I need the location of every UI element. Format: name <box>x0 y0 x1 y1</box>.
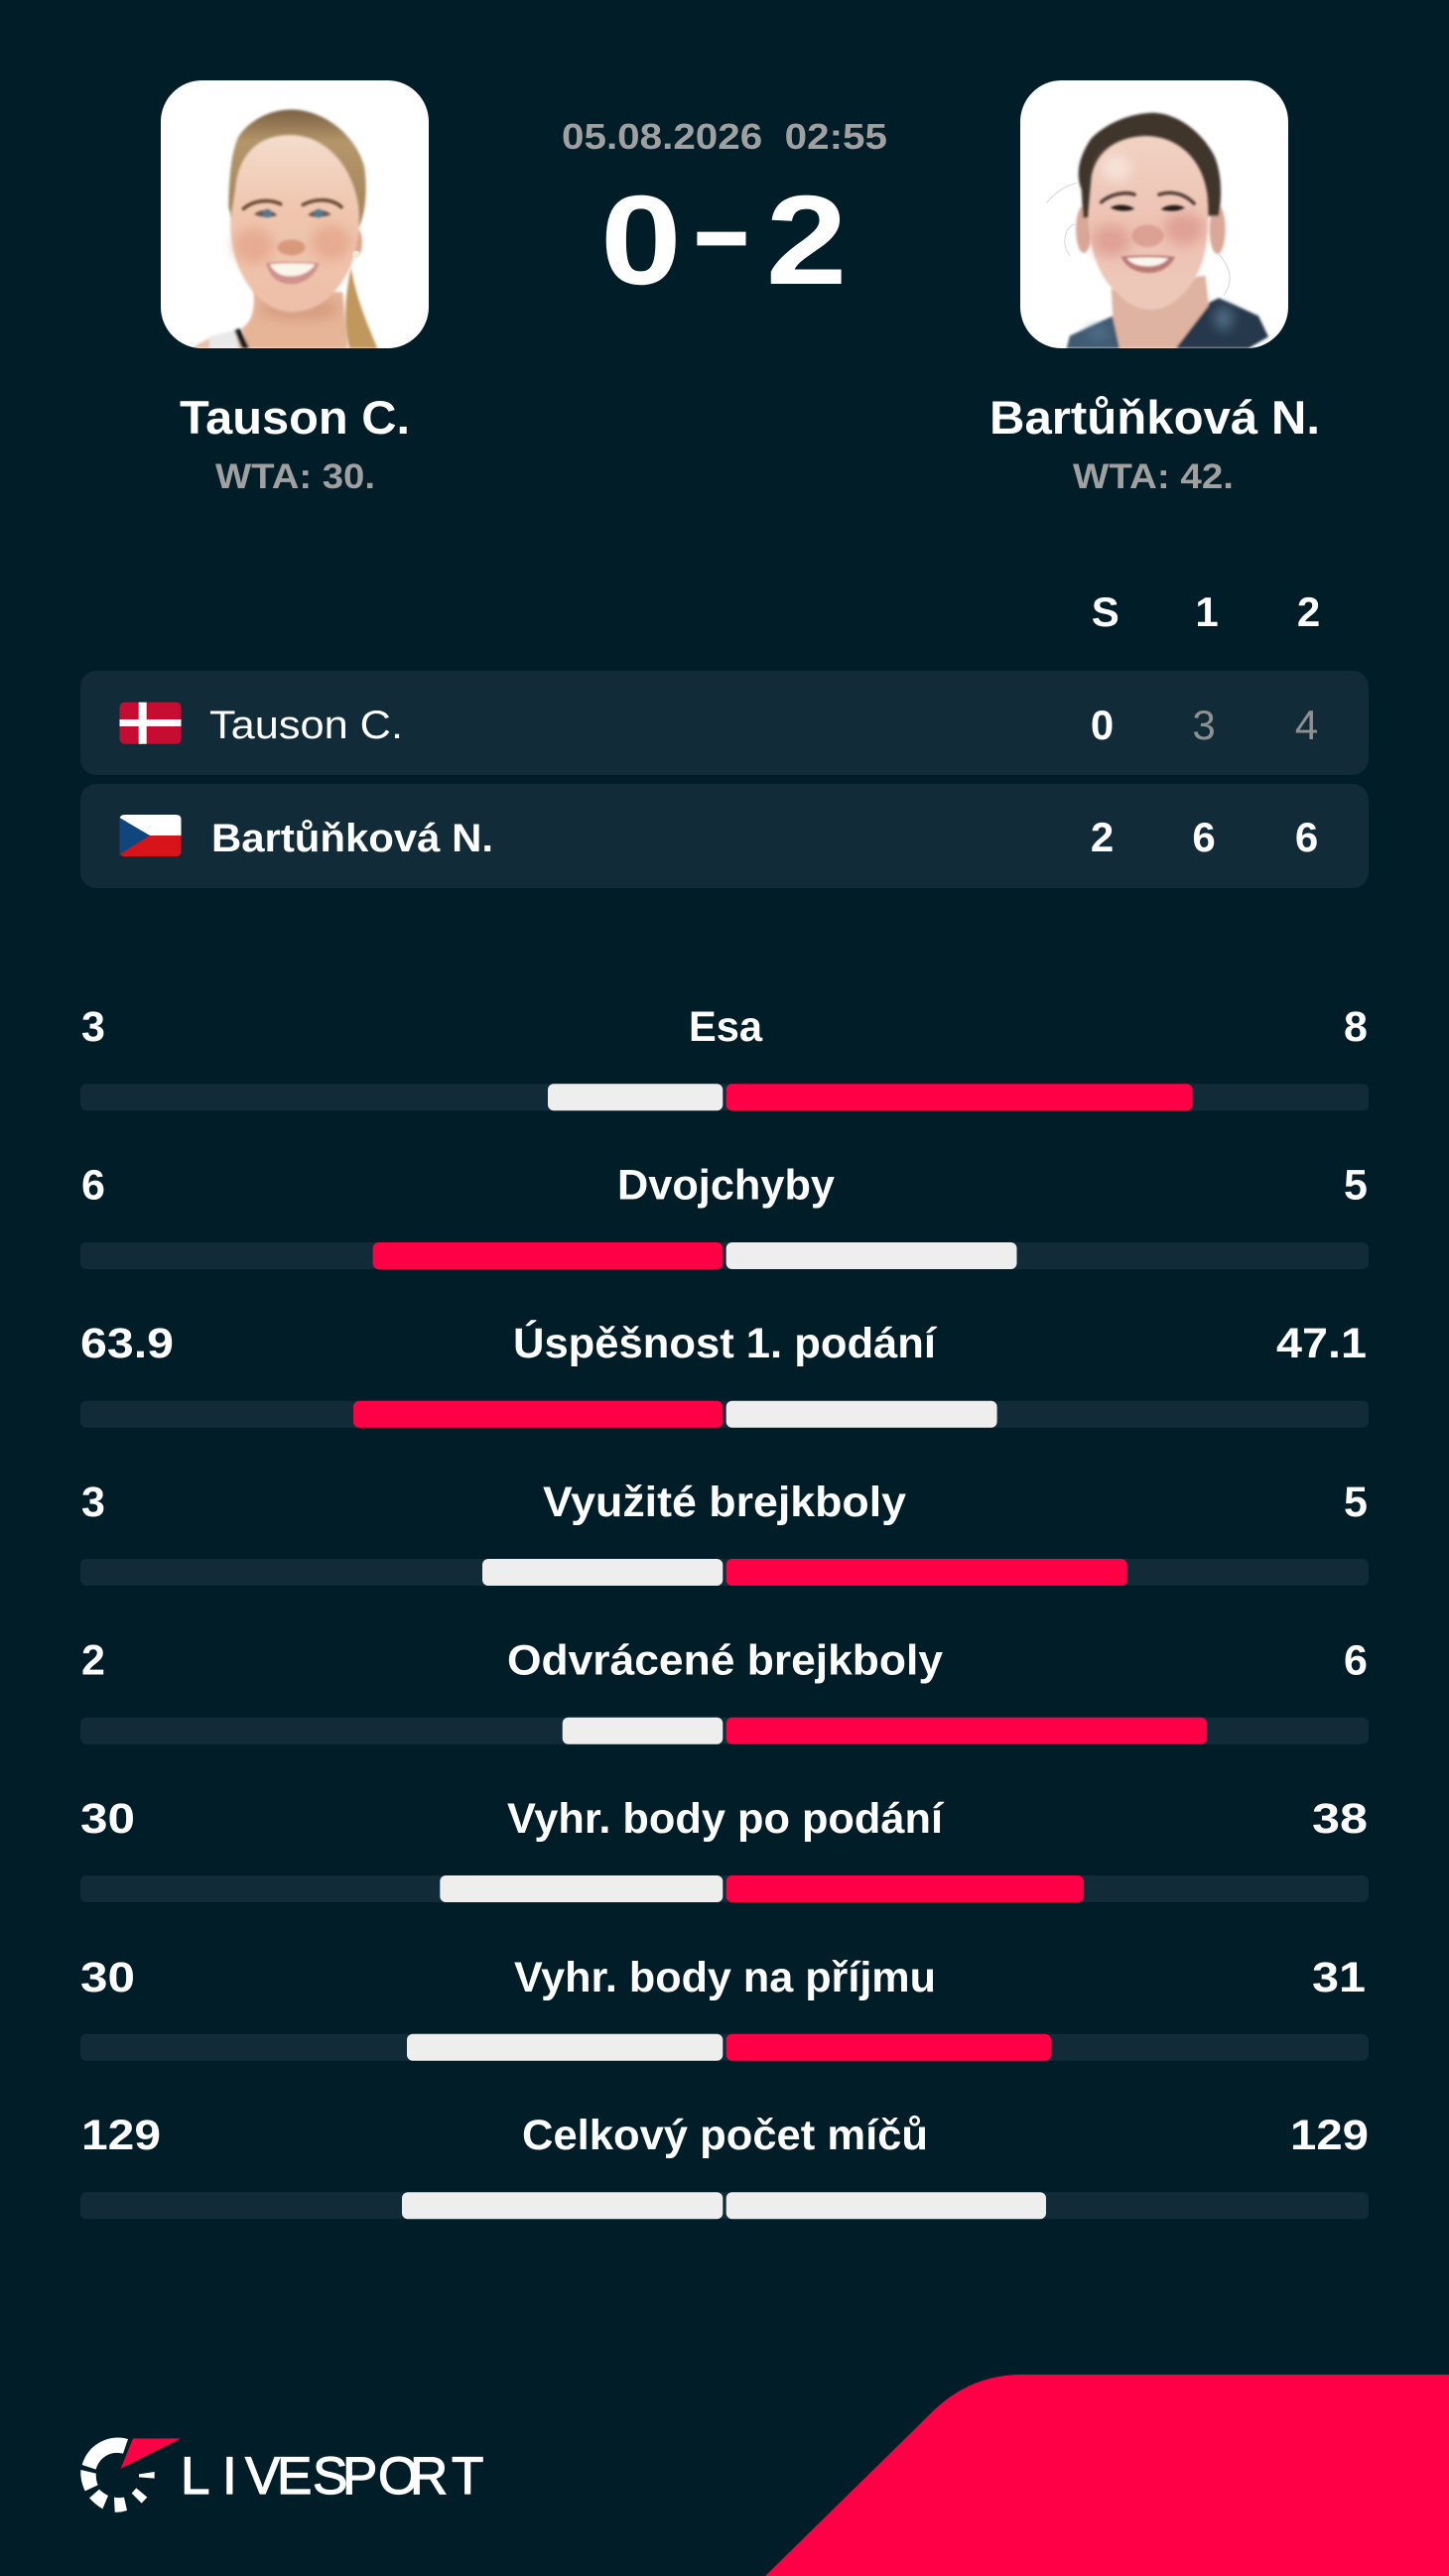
stat: Vyhr. body na příjmu <box>80 1954 1369 2061</box>
stat: Využité brejkboly <box>80 1479 1369 1586</box>
stat: Celkový počet míčů: Celkový počet míčů <box>522 2112 928 2159</box>
row scores: 4 <box>1295 702 1318 748</box>
stat: Odvrácené brejkboly: 2 <box>81 1637 105 1685</box>
row scores: 2 <box>1091 814 1114 860</box>
stat: Využité brejkboly: 5 <box>1344 1479 1368 1526</box>
icon: flag of Denmark <box>119 703 181 744</box>
stat: Esa: Esa <box>689 1003 763 1051</box>
player name in row: Bartůňková N. <box>211 817 493 860</box>
stat: Celkový počet míčů: 129 <box>1290 2112 1369 2159</box>
score table column headers: S <box>1092 588 1120 635</box>
logo: Livesport <box>80 2438 483 2512</box>
stat: Využité brejkboly: Využité brejkboly <box>543 1479 906 1526</box>
stat: Celkový počet míčů: 129 <box>81 2112 161 2159</box>
row scores: 6 <box>1192 814 1216 860</box>
statistics panel <box>80 1003 1369 2219</box>
decorative corner wedge <box>765 2375 1449 2576</box>
player photo: Tauson C. <box>161 80 429 348</box>
stat: Úspěšnost 1. podání: Úspěšnost 1. podání <box>513 1319 938 1367</box>
stat: Celkový počet míčů <box>80 2112 1369 2219</box>
player ranking: Bartůňková N.: WTA: 42. <box>1073 457 1234 496</box>
logo wordmark: LIVESPORT <box>181 2447 483 2506</box>
player name in row: Tauson C. <box>209 704 403 747</box>
stat: Dvojchyby <box>80 1162 1369 1269</box>
row scores: 0 <box>1091 702 1114 748</box>
score table column headers: 1 <box>1195 588 1219 635</box>
stat: Úspěšnost 1. podání <box>80 1319 1369 1428</box>
stat: Vyhr. body na příjmu: 31 <box>1312 1954 1366 2001</box>
stat: Esa: 8 <box>1344 1003 1368 1051</box>
stat: Vyhr. body po podání: Vyhr. body po podání <box>507 1795 945 1843</box>
stat: Vyhr. body po podání: 38 <box>1312 1795 1368 1843</box>
stat: Vyhr. body po podání: 30 <box>80 1795 135 1843</box>
row scores <box>1091 702 1318 748</box>
score table column headers <box>1092 588 1320 635</box>
row scores: 6 <box>1295 814 1318 860</box>
player ranking: Tauson C.: WTA: 30. <box>215 457 375 496</box>
stat: Vyhr. body na příjmu: Vyhr. body na příjmu <box>514 1954 936 2001</box>
stat: Dvojchyby: 5 <box>1344 1162 1368 1210</box>
row scores <box>1091 814 1318 860</box>
row scores: 3 <box>1192 702 1216 748</box>
stat: Odvrácené brejkboly: 6 <box>1344 1637 1368 1685</box>
stat: Úspěšnost 1. podání: 63.9 <box>80 1320 174 1367</box>
match result: 0-2 <box>600 127 848 322</box>
score table column headers: 2 <box>1297 588 1320 635</box>
player name: Bartůňková N.: Bartůňková N. <box>989 391 1320 444</box>
stat: Esa <box>80 1003 1369 1110</box>
stat: Vyhr. body po podání <box>80 1795 1369 1902</box>
header: players and result <box>161 80 1320 496</box>
stat: Esa: 3 <box>81 1003 105 1051</box>
stat: Vyhr. body na příjmu: 30 <box>80 1954 135 2001</box>
player name: Tauson C.: Tauson C. <box>180 391 410 444</box>
match date and time: 05.08.2026 02:55 <box>562 116 887 157</box>
stat: Odvrácené brejkboly <box>80 1637 1369 1744</box>
stat: Úspěšnost 1. podání: 47.1 <box>1276 1320 1367 1367</box>
stat: Dvojchyby: Dvojchyby <box>617 1162 835 1210</box>
icon: flag of Czech Republic <box>119 815 181 856</box>
stat: Využité brejkboly: 3 <box>81 1479 105 1526</box>
stat: Dvojchyby: 6 <box>81 1162 105 1210</box>
row: Tauson C. <box>80 671 1369 775</box>
icon: Livesport gauge <box>80 2438 181 2512</box>
player photo: Bartůňková N. <box>1020 80 1288 348</box>
row: Bartůňková N. <box>80 784 1369 888</box>
score table <box>80 588 1369 888</box>
stat: Odvrácené brejkboly: Odvrácené brejkboly <box>507 1637 943 1685</box>
